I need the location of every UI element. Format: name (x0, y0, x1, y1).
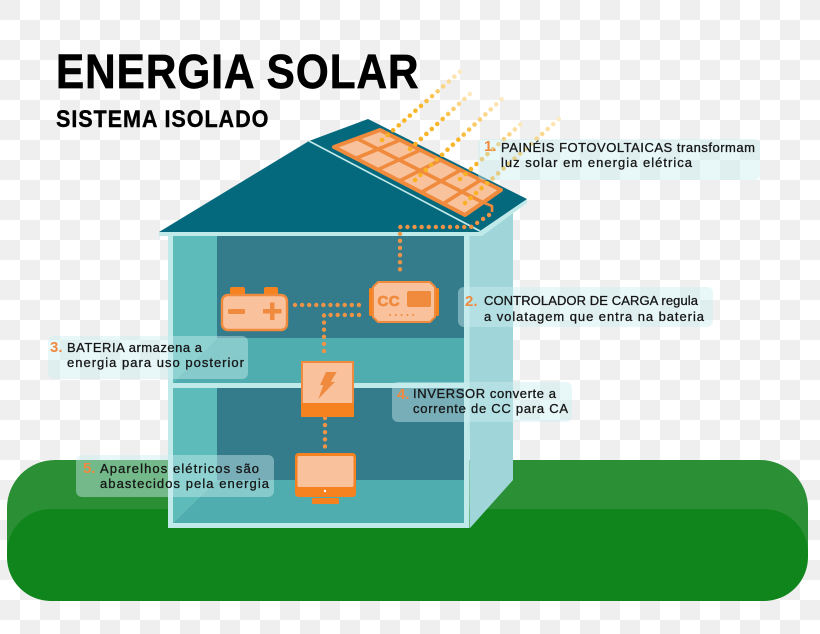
icon: battery (222, 287, 287, 330)
panel grid (356, 138, 483, 204)
dotted wiring (295, 215, 489, 447)
icon: inverter (301, 362, 354, 417)
side wall (469, 213, 513, 528)
upper back wall (217, 236, 464, 338)
callout 2: CONTROLADOR DE CARGA regula (484, 293, 699, 308)
callout 2 (458, 287, 713, 327)
roof side plane (309, 119, 527, 231)
controller label: CC (378, 293, 400, 310)
monitor screen (298, 456, 354, 487)
upper left wall (173, 236, 217, 383)
title: ENERGIA SOLAR (56, 44, 419, 99)
callout 4: corrente de CC para CA (413, 401, 568, 416)
roof eave (159, 199, 527, 236)
callout 4: INVERSOR converte a (413, 386, 557, 401)
callout 1: luz solar em energia elétrica (501, 155, 693, 170)
callout 5: abastecidos pela energia (100, 476, 270, 491)
lower floor (173, 480, 464, 523)
callout 4: 4. (397, 386, 410, 403)
battery terminals (230, 287, 278, 294)
callout 5: 5. (83, 460, 96, 477)
callout 5: Aparelhos elétricos são (100, 461, 259, 476)
lower left wall (173, 388, 217, 523)
monitor stand (312, 498, 339, 504)
callout 2: 2. (465, 293, 478, 310)
roof front gable (159, 141, 480, 232)
roof ridge line (309, 141, 480, 231)
battery body (222, 295, 287, 330)
house frame (168, 234, 470, 528)
monitor power light (324, 490, 326, 492)
callout 5 (76, 455, 274, 497)
solar panel (334, 130, 501, 215)
controller display (407, 291, 431, 307)
controller indicator dots (390, 314, 419, 316)
inverter body (302, 362, 353, 416)
controller side tabs (369, 288, 439, 316)
ground back layer (7, 460, 808, 601)
controller body (373, 282, 435, 322)
lightning bolt (318, 372, 337, 399)
callout 3: BATERIA armazena a (67, 340, 203, 355)
upper floor (173, 338, 464, 383)
ground (7, 460, 808, 601)
minus sign (228, 309, 245, 314)
ground front layer (7, 509, 808, 601)
monitor body (295, 453, 356, 497)
callout 3 (48, 336, 248, 379)
lower back wall (217, 388, 464, 480)
icon: monitor (295, 453, 356, 504)
callout 3: energia para uso posterior (67, 355, 245, 370)
panel cable (482, 202, 492, 212)
callout 1 (478, 138, 760, 180)
panel frame and cells (334, 130, 501, 215)
callout 4 (392, 382, 572, 422)
callout 1: 1. (484, 138, 497, 155)
callout 1: PAINÉIS FOTOVOLTAICAS transformam (501, 140, 755, 155)
subtitle: SISTEMA ISOLADO (56, 105, 268, 132)
callout 3: 3. (50, 339, 63, 356)
plus sign (263, 302, 282, 320)
callout 2: a volatagem que entra na bateria (484, 309, 705, 324)
sun rays (382, 70, 560, 203)
house (159, 119, 527, 528)
icon: charge controller (369, 282, 439, 322)
inverter base (301, 403, 354, 417)
